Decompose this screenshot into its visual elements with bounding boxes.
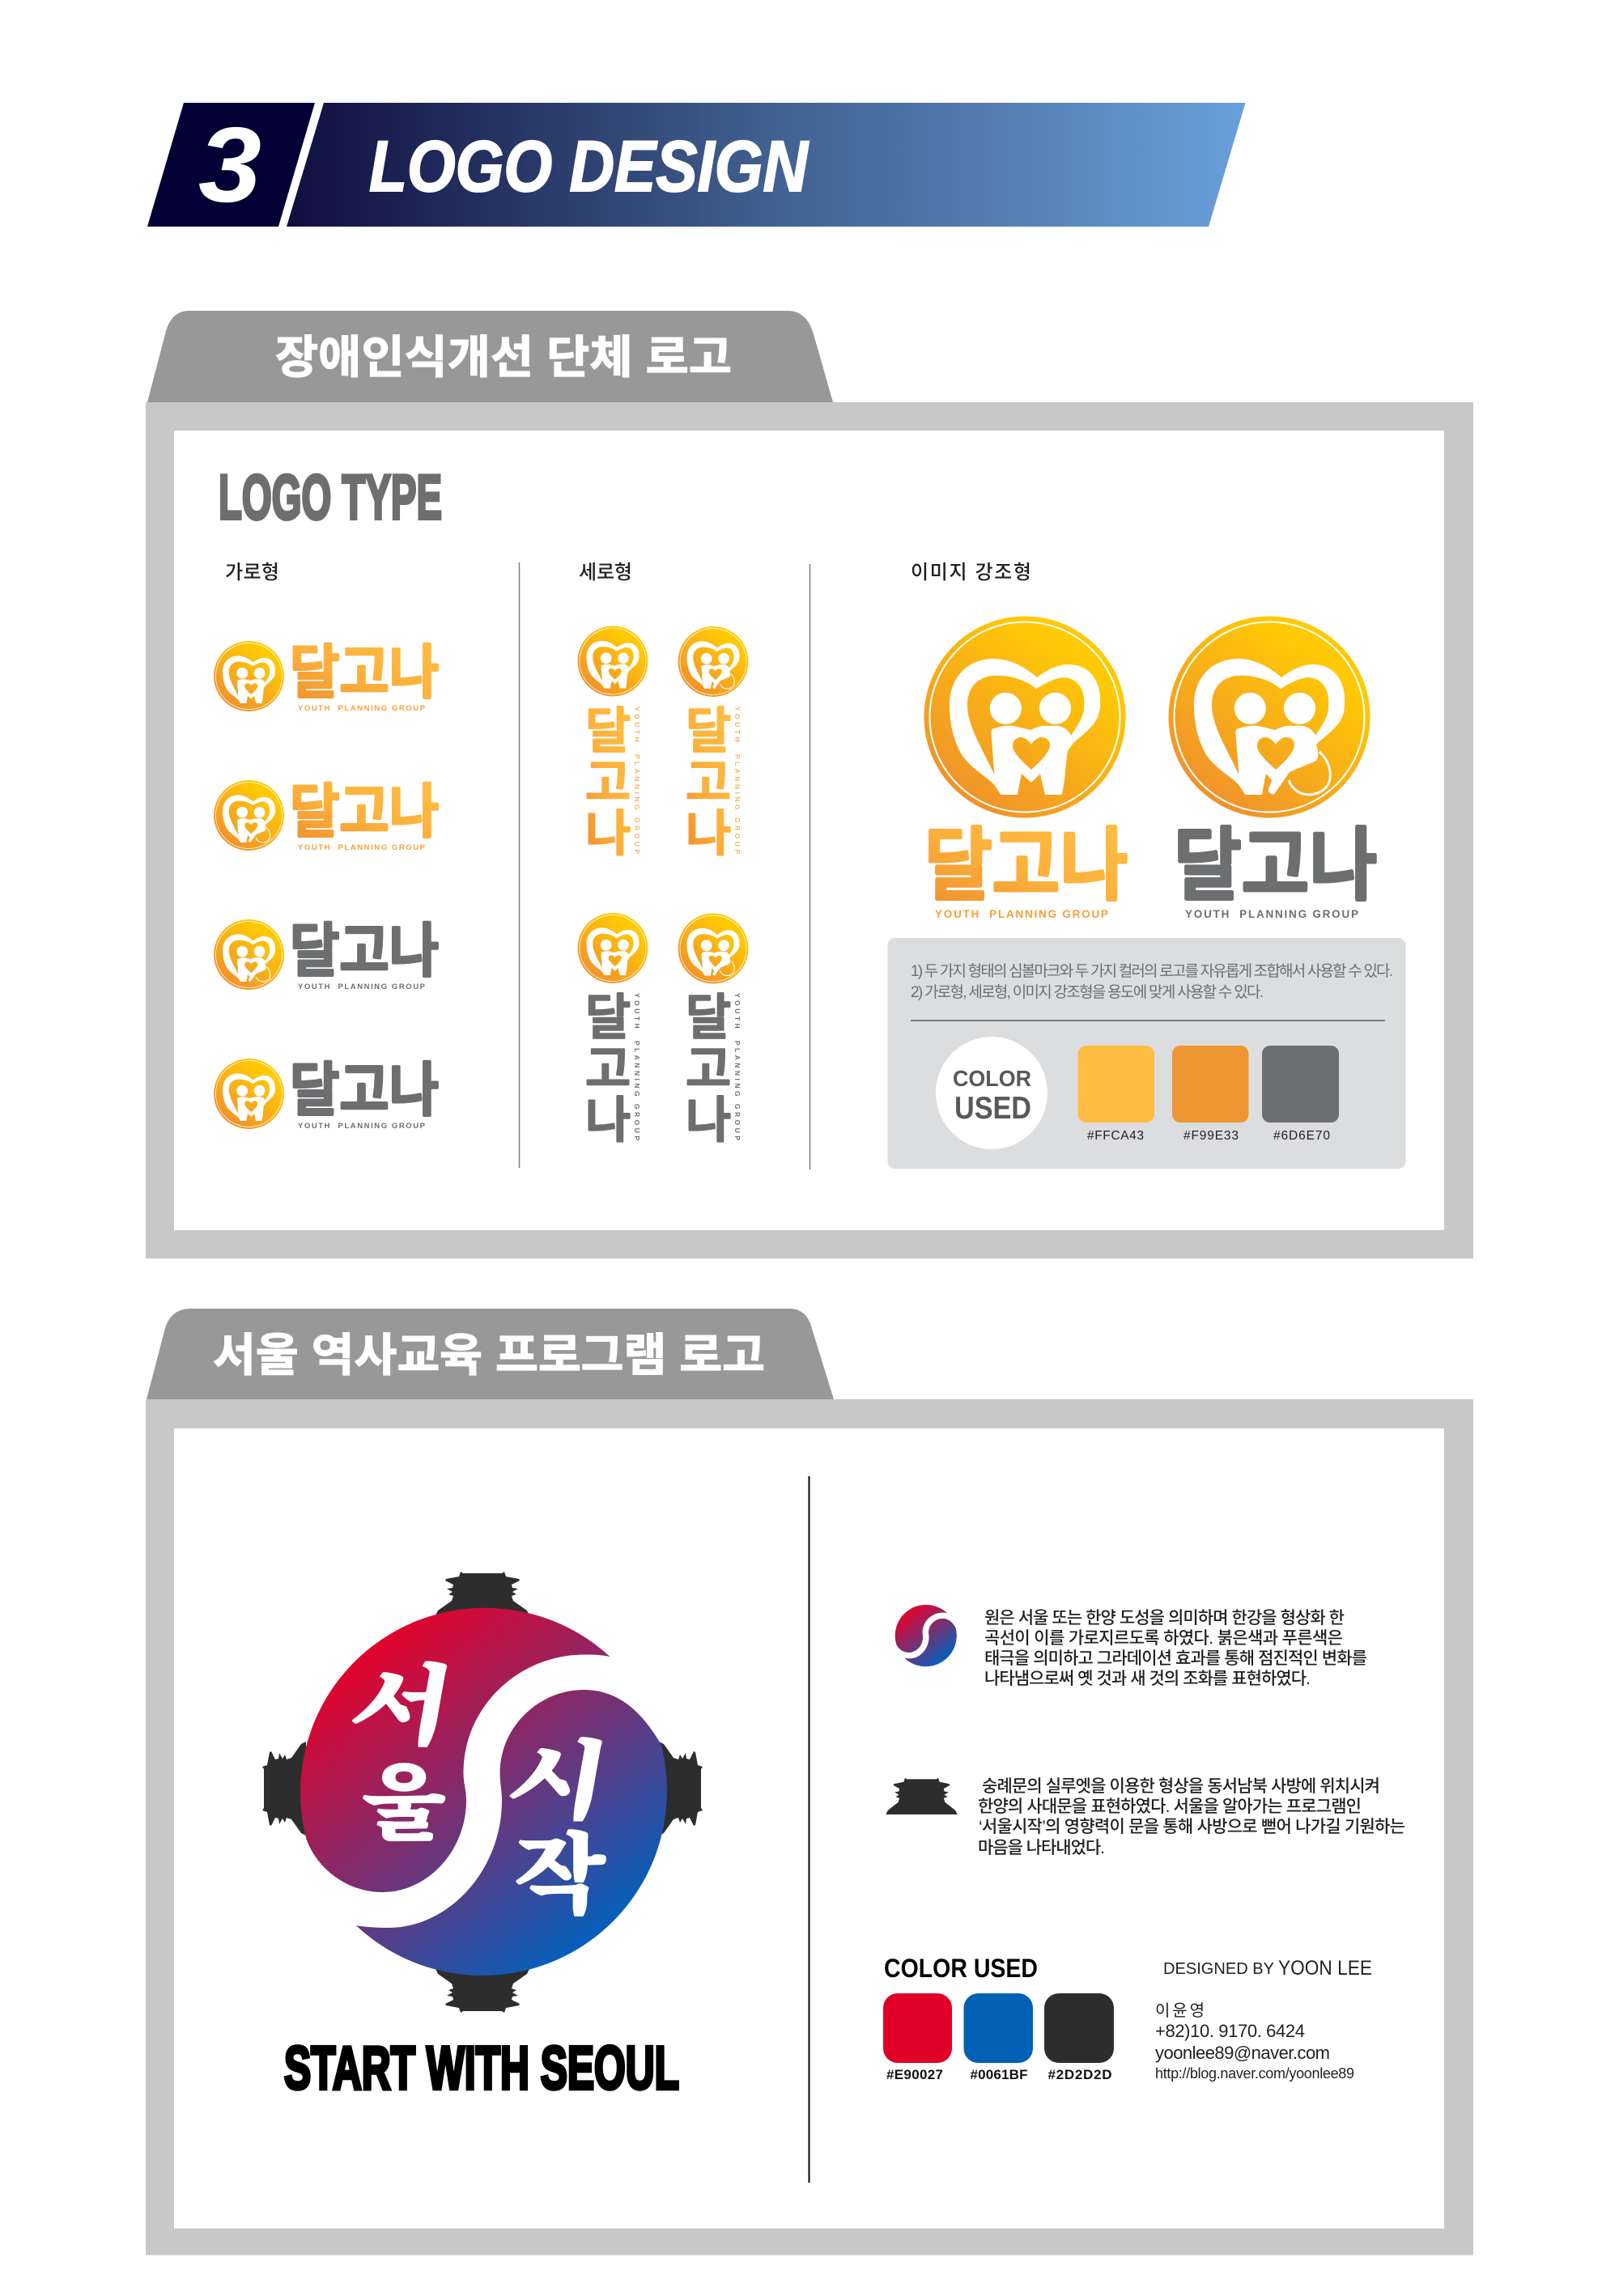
horizontal logo 3: grey with tail: YOUTH PLANNING GROUP	[298, 982, 426, 991]
taeguk circle	[300, 1608, 667, 1976]
horizontal logo 2: orange with tail: 달고나	[290, 780, 439, 845]
panel frame	[146, 1399, 1473, 2255]
horizontal logo 3: grey with tail: 달고나	[290, 919, 439, 984]
swatch F99E33	[1172, 1046, 1248, 1143]
text block: circle meaning	[984, 1609, 1367, 1688]
image emphasis logo: grey with tail: YOUTH PLANNING GROUP	[1185, 908, 1358, 920]
vertical logo 1: orange: 달	[585, 703, 631, 758]
panel frame	[146, 402, 1473, 1258]
vertical logo 3: grey: 고	[585, 1042, 631, 1097]
contact details: +82)10. 9170. 6424	[1155, 2021, 1305, 2041]
contact details: 이 윤 영	[1155, 2001, 1205, 2020]
vertical logo 2: orange with tail	[678, 626, 748, 861]
horizontal logo 1: orange: 달고나	[290, 641, 439, 706]
designer credit	[1155, 1957, 1372, 2082]
swatch 2D2D2D	[1044, 1993, 1114, 2082]
swatch 0061BF	[963, 1993, 1033, 2082]
vertical logo 1: orange: YOUTH PLANNING GROUP	[633, 707, 641, 854]
horizontal logo 1: orange	[214, 641, 439, 713]
vertical logo 3: grey: 나	[585, 1093, 631, 1148]
panel tab heading: 서울 역사교육 프로그램 로고	[213, 1330, 765, 1381]
logo lettering: 서	[342, 1637, 465, 1763]
text block: circle meaning: 태극을 의미하고 그라데이션 효과를 통해 점진적인 변화를	[984, 1649, 1367, 1668]
contact details: yoonlee89@naver.com	[1155, 2043, 1330, 2063]
panel tab heading	[147, 311, 833, 402]
horizontal logo 1: orange: YOUTH PLANNING GROUP	[298, 704, 426, 713]
horizontal logo 2: orange with tail: YOUTH PLANNING GROUP	[298, 843, 426, 852]
panel: disability awareness group logo	[146, 311, 1473, 1258]
gate silhouettes	[262, 1572, 703, 2013]
text block: circle meaning: 곡선이 이를 가로지르도록 하였다. 붉은색과 푸른색은	[984, 1629, 1343, 1648]
text block: gate meaning: 마음을 나타내었다.	[978, 1839, 1105, 1857]
logo lettering: 작	[514, 1805, 606, 1930]
swatch FFCA43: #FFCA43	[1087, 1129, 1144, 1143]
vertical logo 2: orange with tail: 고	[686, 755, 731, 810]
text block: gate meaning: 한양의 사대문을 표현하였다. 서울을 알아가는 프로그램인	[978, 1797, 1362, 1816]
image emphasis logo: orange: YOUTH PLANNING GROUP	[935, 908, 1108, 920]
swatch 6D6E70	[1262, 1046, 1339, 1143]
color used badge: USED	[954, 1091, 1031, 1126]
text block: circle meaning: 나타냄으로써 옛 것과 새 것의 조화를 표현하였다.	[984, 1670, 1311, 1688]
vertical logo 1: orange	[578, 626, 648, 861]
section banner: 3 LOGO DESIGN	[147, 103, 1245, 227]
swatch 6D6E70: #6D6E70	[1273, 1129, 1330, 1143]
logo lettering: 시	[498, 1712, 620, 1836]
vertical logo 1: orange: 고	[585, 755, 631, 810]
designed by	[1163, 1957, 1372, 1980]
label: horizontal: 가로형	[225, 562, 279, 584]
horizontal logo 4: grey: 달고나	[290, 1059, 439, 1123]
vertical logo 3: grey: 달	[585, 990, 631, 1045]
banner title	[287, 103, 1245, 227]
usage notes: 2) 가로형, 세로형, 이미지 강조형을 용도에 맞게 사용할 수 있다.	[911, 983, 1264, 1001]
vertical logo 4: grey with tail: 달	[686, 990, 731, 1045]
banner number block: 3	[198, 105, 261, 224]
designed by: DESIGNED BY	[1163, 1960, 1274, 1978]
logo: start with Seoul	[262, 1572, 703, 2102]
vertical logo 4: grey with tail: 나	[686, 1093, 731, 1148]
info box: usage notes and colours	[887, 938, 1405, 1169]
text block: gate meaning: 숭례문의 실루엣을 이용한 형상을 동서남북 사방에 위치시켜	[982, 1777, 1380, 1796]
horizontal logo 2: orange with tail	[214, 780, 439, 852]
image emphasis logo: grey with tail	[1169, 617, 1377, 920]
logo lettering: 울	[362, 1735, 446, 1857]
icon: gate silhouette	[886, 1778, 958, 1814]
horizontal logo 4: grey: YOUTH PLANNING GROUP	[298, 1122, 426, 1131]
heading: color used: COLOR USED	[884, 1954, 1038, 1983]
vertical logo 3: grey	[578, 913, 648, 1148]
horizontal logo 3: grey with tail	[214, 919, 439, 991]
label: vertical: 세로형	[579, 562, 632, 584]
slogan: START WITH SEOUL	[284, 2034, 679, 2102]
swatch E90027: #E90027	[886, 2067, 943, 2082]
vertical logo 1: orange: 나	[585, 806, 631, 861]
text block: gate meaning	[978, 1777, 1405, 1857]
swatch 2D2D2D: #2D2D2D	[1047, 2067, 1112, 2082]
text block: circle meaning: 원은 서울 또는 한양 도성을 의미하며 한강을 형상화 한	[984, 1609, 1345, 1628]
vertical logo 2: orange with tail: 나	[686, 806, 731, 861]
heading: logo type: LOGO TYPE	[219, 461, 442, 533]
contact details	[1155, 2001, 1354, 2082]
vertical logo 3: grey: YOUTH PLANNING GROUP	[633, 993, 641, 1140]
icon: taeguk emblem	[895, 1605, 957, 1666]
panel: Seoul history education program logo	[146, 1309, 1473, 2255]
usage notes	[911, 962, 1393, 1001]
text block: gate meaning: ‘서울시작’의 영향력이 문을 통해 사방으로 뻗어 나가길 기원하는	[979, 1818, 1405, 1836]
vertical logo 4: grey with tail	[678, 914, 748, 1148]
image emphasis logo: grey with tail: 달고나	[1174, 821, 1377, 910]
swatch 0061BF: #0061BF	[970, 2067, 1028, 2082]
designed by: YOON LEE	[1278, 1957, 1372, 1980]
label: image emphasis: 이미지 강조형	[911, 562, 1031, 584]
contact details: http://blog.naver.com/yoonlee89	[1155, 2065, 1354, 2082]
logo lettering	[342, 1637, 620, 1930]
swatch FFCA43	[1078, 1046, 1154, 1143]
color used badge: COLOR	[953, 1066, 1031, 1091]
horizontal logo 4: grey	[214, 1059, 439, 1131]
color used badge	[936, 1037, 1047, 1149]
vertical logo 2: orange with tail: 달	[686, 703, 731, 758]
panel tab heading	[147, 1309, 834, 1399]
swatch E90027	[883, 1993, 952, 2082]
swatch F99E33: #F99E33	[1183, 1129, 1239, 1143]
image emphasis logo: orange	[924, 617, 1128, 920]
color used section	[883, 1954, 1114, 2082]
banner number block	[147, 103, 315, 227]
vertical logo 2: orange with tail: YOUTH PLANNING GROUP	[733, 707, 742, 854]
usage notes: 1) 두 가지 형태의 심볼마크와 두 가지 컬러의 로고를 자유롭게 조합해서 사용할 수 있다.	[911, 962, 1393, 980]
vertical logo 4: grey with tail: YOUTH PLANNING GROUP	[733, 993, 742, 1140]
panel tab heading: 장애인식개선 단체 로고	[275, 332, 732, 383]
vertical logo 4: grey with tail: 고	[686, 1042, 731, 1097]
image emphasis logo: orange: 달고나	[924, 821, 1128, 910]
banner title: LOGO DESIGN	[369, 125, 809, 206]
